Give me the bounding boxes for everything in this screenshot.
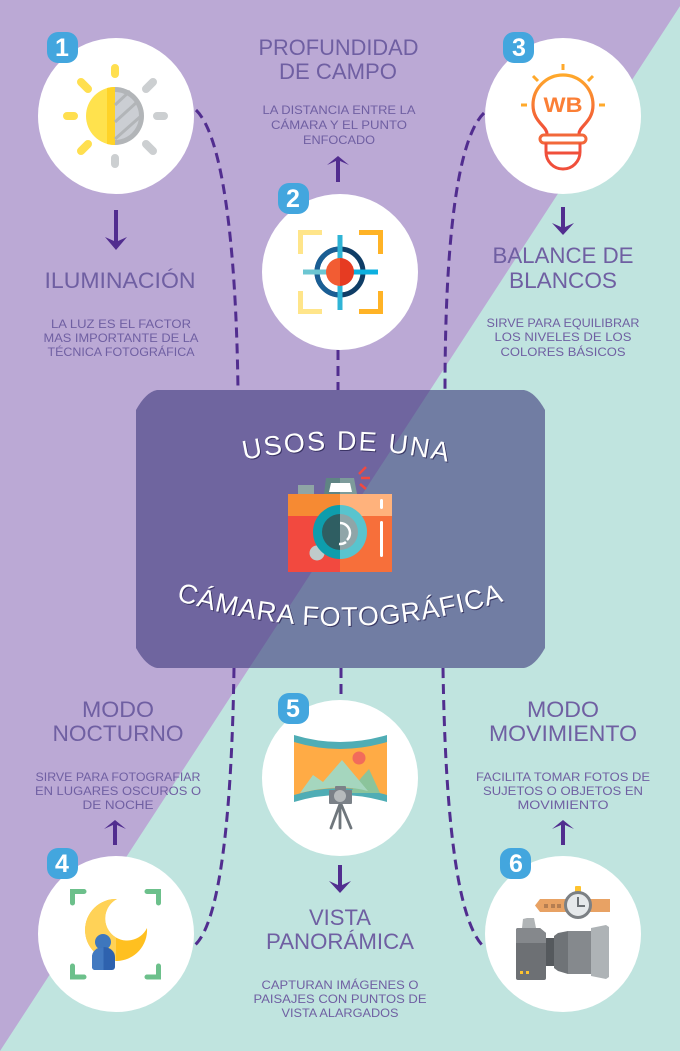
icon: WB light bulb — [521, 64, 605, 169]
badge 2: 2 — [286, 185, 300, 213]
heading 6: MODO — [527, 697, 599, 722]
heading 4: NOCTURNO — [52, 721, 184, 746]
icon: WB light bulb: WB — [544, 94, 582, 117]
body 3 — [486, 316, 640, 359]
badge 5 — [278, 693, 309, 724]
connector: 3 to centre — [445, 113, 484, 390]
arrow 5 down — [329, 865, 351, 893]
connector: 1 to centre — [196, 110, 238, 390]
body 1: LA LUZ ES EL FACTOR — [51, 317, 191, 331]
panel 6: modo movimiento — [476, 697, 650, 1012]
body 3: LOS NIVELES DE LOS — [494, 330, 632, 344]
body 6: SUJETOS O OBJETOS EN — [483, 784, 643, 798]
body 4 — [35, 770, 201, 812]
body 2: ENFOCADO — [303, 133, 375, 147]
arrow 3 down — [552, 207, 574, 235]
panel 4: modo nocturno — [35, 697, 201, 1012]
icon: half sun — [67, 68, 164, 164]
body 1: TÉCNICA FOTOGRÁFICA — [48, 344, 195, 359]
body 5: PAISAJES CON PUNTOS DE — [254, 992, 426, 1006]
body 2 — [262, 103, 416, 147]
badge 6: 6 — [509, 850, 523, 878]
central panel — [136, 390, 545, 668]
body 2: LA DISTANCIA ENTRE LA — [262, 103, 416, 117]
icon: camera — [288, 467, 392, 572]
heading 5: VISTA — [309, 905, 371, 930]
arrow 2 up — [327, 156, 349, 182]
badge 5: 5 — [286, 695, 300, 723]
arrow 6 up — [552, 820, 574, 845]
panel 1: iluminación — [38, 32, 199, 359]
body 4: DE NOCHE — [82, 798, 154, 812]
body 5: VISTA ALARGADOS — [282, 1006, 398, 1020]
arrow 4 up — [104, 820, 126, 845]
body 1 — [44, 317, 199, 359]
heading 2: PROFUNDIDAD — [258, 35, 418, 60]
body 5 — [254, 977, 426, 1020]
body 3: SIRVE PARA EQUILIBRAR — [486, 316, 640, 330]
icon: panorama on tripod — [294, 735, 387, 828]
icon: focus target — [300, 232, 380, 312]
badge 4 — [47, 848, 78, 879]
badge 4: 4 — [55, 850, 69, 878]
body 4: SIRVE PARA FOTOGRAFIAR — [36, 770, 201, 784]
body 4: EN LUGARES OSCUROS O — [35, 784, 201, 798]
heading 4 — [52, 697, 184, 746]
heading 2 — [258, 35, 418, 84]
badge 1 — [47, 32, 78, 63]
badge 2 — [278, 183, 309, 214]
icon: camera with watch — [516, 886, 610, 980]
title top arc: USOS DE UNA — [242, 431, 448, 463]
heading 6: MOVIMIENTO — [489, 721, 637, 746]
arrow 1 down — [105, 210, 127, 250]
body 5: CAPTURAN IMÁGENES O — [262, 977, 419, 992]
badge 1: 1 — [55, 34, 69, 62]
title bottom arc: CÁMARA FOTOGRÁFICA — [180, 584, 505, 628]
badge 3: 3 — [512, 34, 526, 62]
connector: 5 to centre — [340, 668, 342, 700]
heading 5: PANORÁMICA — [266, 929, 414, 954]
icon: moon with person — [72, 892, 158, 977]
body 6: MOVIMIENTO — [518, 798, 609, 812]
badge 3 — [503, 32, 534, 63]
heading 3 — [492, 243, 634, 293]
badge 6 — [500, 848, 531, 879]
heading 4: MODO — [82, 697, 154, 722]
heading 3: BLANCOS — [509, 268, 617, 293]
panel 2: profundidad de campo — [258, 35, 418, 350]
body 6: FACILITA TOMAR FOTOS DE — [476, 770, 650, 784]
body 3: COLORES BÁSICOS — [500, 344, 626, 359]
panel 3: balance de blancos — [485, 32, 641, 359]
heading 5 — [266, 905, 414, 954]
connector: 2 to centre — [336, 350, 340, 390]
body 1: MAS IMPORTANTE DE LA — [44, 331, 199, 345]
heading 2: DE CAMPO — [279, 59, 397, 84]
heading 6 — [489, 697, 637, 746]
panel 5: vista panorámica — [254, 693, 426, 1020]
body 2: CÁMARA Y EL PUNTO — [271, 117, 407, 132]
connector: 4 to centre — [195, 668, 234, 945]
heading 3: BALANCE DE — [492, 243, 634, 268]
heading 1: ILUMINACIÓN — [44, 268, 196, 293]
body 6 — [476, 770, 650, 812]
connector: 6 to centre — [443, 668, 484, 947]
